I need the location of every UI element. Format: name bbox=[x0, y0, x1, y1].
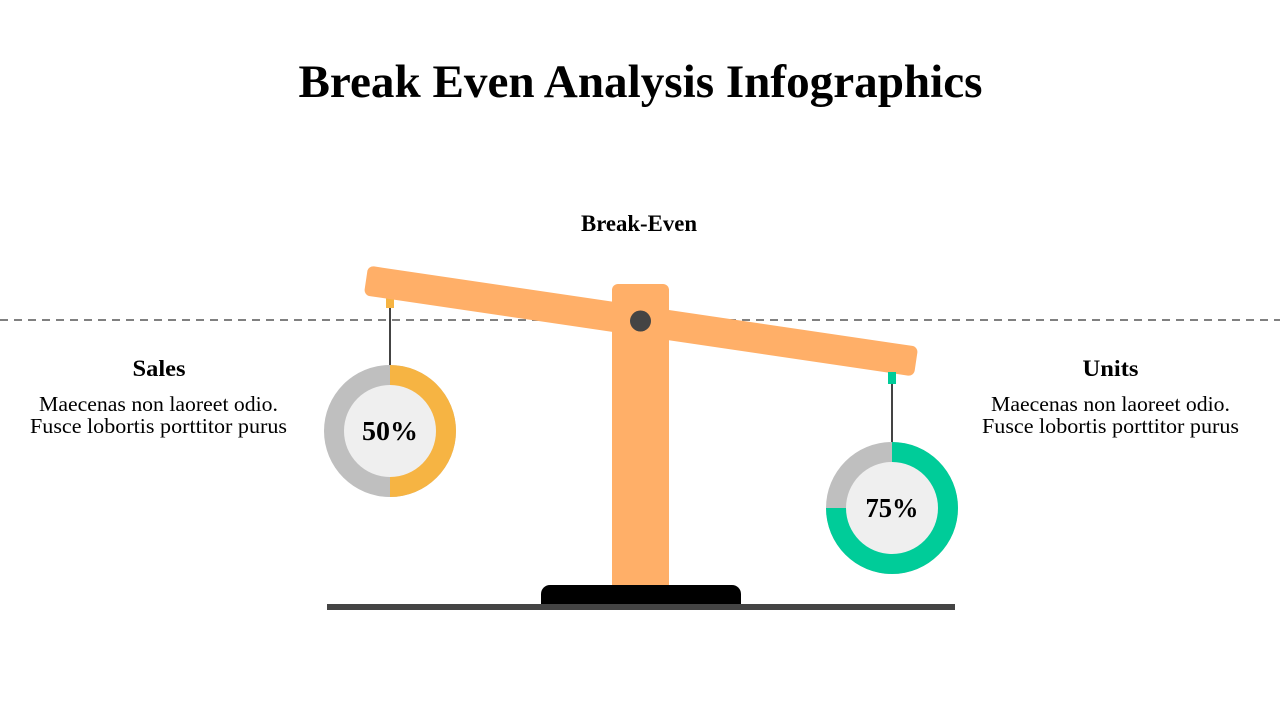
text block: sales: Sales bbox=[132, 356, 186, 381]
ground line bbox=[327, 604, 955, 610]
text block: sales: Fusce lobortis porttitor purus bbox=[30, 414, 287, 438]
text block: units: Maecenas non laoreet odio. bbox=[991, 392, 1230, 416]
scale base bbox=[541, 585, 741, 604]
text block: units bbox=[982, 356, 1239, 438]
text block: sales bbox=[30, 356, 287, 438]
donut: sales 50% bbox=[324, 365, 456, 497]
donut: units 75% bbox=[826, 442, 958, 574]
scale post bbox=[612, 284, 669, 586]
donut: sales 50%: 50% bbox=[362, 416, 418, 446]
text block: units: Units bbox=[1082, 356, 1139, 381]
heading: Break-Even: Break-Even bbox=[581, 211, 697, 236]
title: Break Even Analysis Infographics bbox=[298, 56, 982, 108]
right hanger clip bbox=[888, 372, 896, 384]
right hanger bbox=[891, 384, 893, 443]
balance scale bbox=[327, 266, 955, 610]
text block: units: Fusce lobortis porttitor purus bbox=[982, 414, 1239, 438]
scale beam bbox=[364, 266, 918, 376]
pivot bbox=[630, 310, 651, 332]
left hanger bbox=[386, 296, 394, 366]
donut: units 75%: 75% bbox=[866, 493, 918, 523]
text block: sales: Maecenas non laoreet odio. bbox=[39, 392, 278, 416]
